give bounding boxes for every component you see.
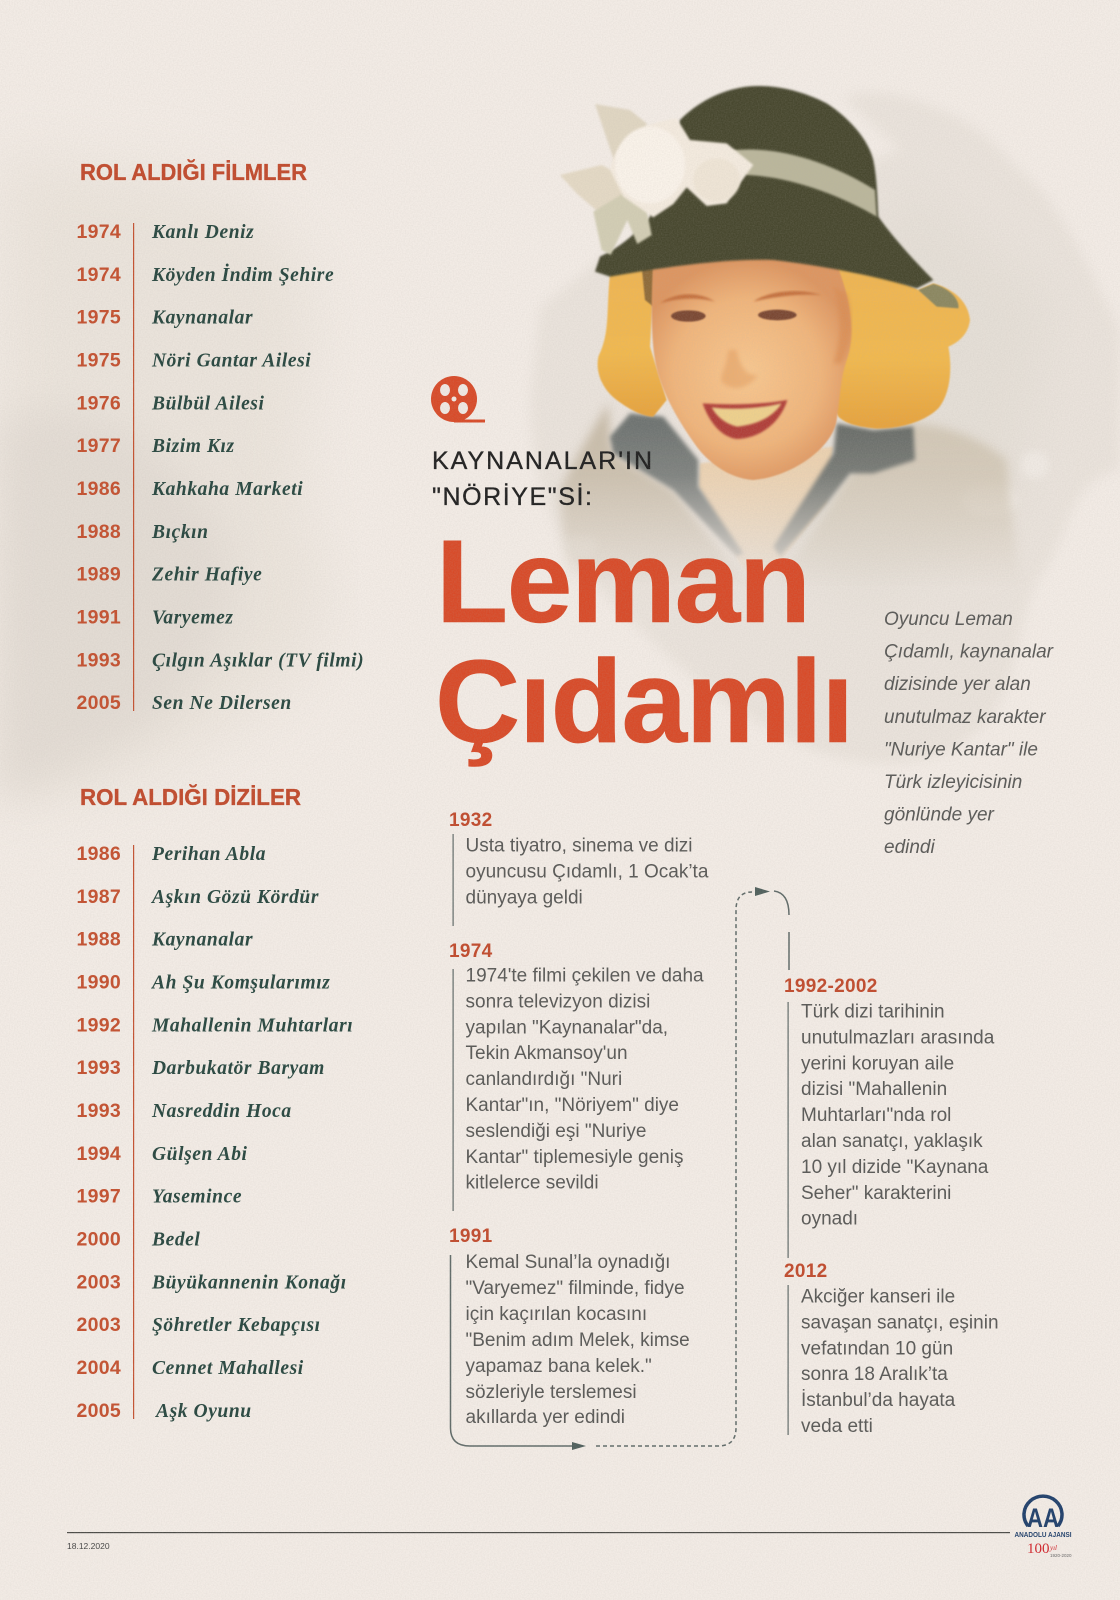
series rows: 1993: [76, 1057, 121, 1079]
timeline: 1974: sonra televizyon dizisi: [466, 991, 650, 1012]
timeline: 2012: İstanbul’da hayata: [801, 1390, 956, 1411]
timeline: 1991: akıllarda yer edindi: [466, 1407, 625, 1428]
series rows: Kaynanalar: [151, 930, 253, 951]
series rows: 1992: [76, 1014, 121, 1036]
divider line: series: [133, 845, 134, 1419]
timeline: 2012: veda etti: [801, 1416, 873, 1437]
timeline: 1974: 1974: [449, 941, 493, 962]
clothes fading into background: [556, 406, 1014, 570]
series rows: Şöhretler Kebapçısı: [152, 1315, 321, 1336]
panel: films list: [76, 158, 364, 714]
film rows: 1975: [76, 350, 121, 372]
title: name: Çıdamlı: [435, 636, 854, 768]
series rows: 1987: [76, 886, 121, 908]
series rows: [76, 843, 353, 1422]
series rows: Cennet Mahallesi: [152, 1358, 304, 1379]
timeline: 1932: dünyaya geldi: [466, 887, 583, 908]
timeline: 2012: savaşan sanatçı, eşinin: [801, 1312, 999, 1333]
film rows: 2005: [76, 692, 121, 714]
timeline: 1992-2002: [784, 976, 995, 1258]
series rows: 1986: [76, 843, 121, 865]
heading: series: ROL ALDIĞI DİZİLER: [80, 783, 301, 810]
series rows: 2005: [76, 1400, 121, 1422]
logo: Anadolu Ajansı: 100: [1027, 1541, 1050, 1557]
face: [652, 257, 851, 480]
series rows: Bedel: [151, 1230, 200, 1251]
series rows: 1997: [76, 1186, 121, 1208]
timeline: 1991: için kaçırılan kocasını: [466, 1304, 647, 1325]
timeline: 1992-2002: yerini koruyan aile: [801, 1053, 954, 1074]
timeline: 2012: 2012: [784, 1261, 827, 1282]
timeline: 1932: oyuncusu Çıdamlı, 1 Ocak’ta: [466, 861, 709, 882]
intro text: edindi: [884, 837, 935, 858]
title: name: [435, 516, 854, 768]
film rows: 1986: [76, 478, 121, 500]
film rows: 1993: [76, 649, 121, 671]
series rows: Aşk Oyunu: [154, 1401, 252, 1422]
logo: Anadolu Ajansı: ANADOLU AJANSI: [1014, 1530, 1072, 1539]
series rows: 1988: [76, 929, 121, 951]
film rows: Varyemez: [152, 608, 234, 629]
timeline: 1992-2002: Muhtarları"nda rol: [801, 1105, 951, 1126]
series rows: 2000: [76, 1229, 121, 1251]
timeline connector arrow: [450, 887, 789, 1450]
timeline: 1992-2002: 1992-2002: [784, 976, 878, 997]
timeline: 1992-2002: Türk dizi tarihinin: [801, 1002, 945, 1022]
film rows: Çılgın Aşıklar (TV filmi): [152, 650, 364, 671]
timeline: 1991: "Benim adım Melek, kimse: [466, 1330, 690, 1351]
timeline: 2012: sonra 18 Aralık’ta: [801, 1364, 948, 1385]
timeline: 1974: Kantar"ın, "Nöriyem" diye: [466, 1095, 679, 1116]
intro text: unutulmaz karakter: [884, 707, 1046, 728]
timeline: 1932: [449, 810, 709, 926]
timeline: 1991: [449, 1226, 690, 1428]
film rows: Bülbül Ailesi: [151, 393, 264, 414]
film rows: 1977: [76, 435, 121, 457]
series rows: Darbukatör Baryam: [151, 1058, 325, 1079]
kicker heading: KAYNANALAR'IN: [432, 447, 652, 475]
series rows: Büyükannenin Konağı: [151, 1272, 347, 1293]
timeline: 1974: yapılan "Kaynanalar"da,: [466, 1017, 668, 1038]
portrait photo of Leman Çıdamlı: [560, 86, 1020, 593]
intro text: "Nuriye Kantar" ile: [884, 739, 1038, 760]
series rows: 2003: [76, 1314, 121, 1336]
date: 18.12.2020: [67, 1541, 110, 1551]
film rows: 1989: [76, 564, 121, 586]
hat: [595, 86, 933, 288]
logo: Anadolu Ajansı: [1014, 1496, 1072, 1558]
film rows: 1975: [76, 307, 121, 329]
logo: Anadolu Ajansı: AA: [1027, 1503, 1059, 1533]
timeline: 1992-2002: oynadı: [801, 1209, 858, 1230]
panel: series list: [76, 783, 353, 1422]
icon: film reel: [431, 376, 485, 422]
kicker heading: [432, 447, 652, 511]
intro text: [884, 609, 1054, 858]
timeline: 1974: canlandırdığı "Nuri: [466, 1069, 622, 1090]
timeline: 1992-2002: Seher" karakterini: [801, 1183, 951, 1204]
divider line: films: [133, 223, 134, 711]
film rows: Bıçkın: [151, 522, 209, 543]
series rows: 1990: [76, 972, 121, 994]
intro text: Oyuncu Leman: [884, 609, 1013, 630]
film rows: 1974: [76, 264, 121, 286]
heading: films: ROL ALDIĞI FİLMLER: [80, 158, 307, 185]
title: name: Leman: [436, 516, 811, 648]
timeline: 1974: Kantar" tiplemesiyle geniş: [466, 1147, 683, 1168]
series rows: 2003: [76, 1271, 121, 1293]
series rows: Mahallenin Muhtarları: [151, 1015, 353, 1036]
series rows: 1993: [76, 1100, 121, 1122]
film rows: Zehir Hafiye: [151, 565, 262, 586]
series rows: Aşkın Gözü Kördür: [150, 887, 319, 908]
timeline: 1974: [449, 941, 704, 1211]
timeline: 1991: 1991: [449, 1226, 493, 1247]
intro text: gönlünde yer: [884, 805, 995, 826]
film rows: 1988: [76, 521, 121, 543]
hat flower: [560, 104, 753, 255]
hat band: [730, 149, 877, 217]
timeline: 1932: 1932: [449, 810, 492, 831]
film rows: [76, 221, 364, 714]
eyes and brows: [660, 294, 715, 303]
film rows: Kanlı Deniz: [151, 222, 254, 243]
timeline: 1992-2002: unutulmazları arasında: [801, 1027, 995, 1048]
timeline: 1991: yapamaz bana kelek.": [466, 1356, 652, 1377]
intro text: Türk izleyicisinin: [884, 772, 1022, 793]
film rows: Köyden İndim Şehire: [151, 264, 334, 286]
series rows: Perihan Abla: [151, 844, 266, 865]
film rows: Nöri Gantar Ailesi: [151, 350, 311, 372]
timeline: 1992-2002: alan sanatçı, yaklaşık: [801, 1131, 983, 1152]
timeline: 1974: kitlelerce sevildi: [466, 1173, 599, 1194]
logo: Anadolu Ajansı: 1920-2020: [1050, 1553, 1072, 1558]
series rows: 1994: [76, 1143, 121, 1165]
series rows: Nasreddin Hoca: [151, 1101, 292, 1122]
timeline: 1932: Usta tiyatro, sinema ve dizi: [466, 836, 693, 856]
film rows: Kahkaha Marketi: [151, 479, 303, 500]
timeline: 1991: Kemal Sunal’la oynadığı: [466, 1252, 670, 1273]
kicker heading: "NÖRİYE"Sİ:: [432, 482, 592, 511]
timeline: 1974: seslendiği eşi "Nuriye: [466, 1121, 646, 1142]
timeline: 1991: "Varyemez" filminde, fidye: [466, 1278, 685, 1299]
timeline: 2012: Akciğer kanseri ile: [801, 1286, 955, 1308]
film rows: 1974: [76, 221, 121, 243]
intro text: Çıdamlı, kaynanalar: [884, 642, 1054, 663]
timeline: 1992-2002: 10 yıl dizide "Kaynana: [801, 1157, 989, 1178]
film rows: Bizim Kız: [151, 436, 235, 457]
timeline: 2012: vefatından 10 gün: [801, 1338, 953, 1359]
smile: [703, 400, 787, 439]
film rows: 1976: [76, 392, 121, 414]
logo: Anadolu Ajansı: yıl: [1049, 1544, 1057, 1552]
timeline: 1974: Tekin Akmansoy'un: [466, 1043, 628, 1064]
film rows: Sen Ne Dilersen: [152, 693, 292, 714]
film rows: Kaynanalar: [151, 308, 253, 329]
timeline: 1992-2002: dizisi "Mahallenin: [801, 1079, 947, 1100]
series rows: Ah Şu Komşularımız: [150, 972, 330, 994]
series rows: Yasemince: [152, 1187, 242, 1208]
film rows: 1991: [76, 607, 121, 629]
ink stain behind portrait: [530, 93, 1120, 764]
hair: [598, 260, 667, 417]
footer rule: [67, 1532, 1010, 1533]
intro text: dizisinde yer alan: [884, 674, 1031, 695]
series rows: Gülşen Abi: [152, 1144, 248, 1165]
series rows: 2004: [76, 1357, 121, 1379]
timeline: 2012: [784, 1261, 999, 1437]
timeline: 1974: 1974'te filmi çekilen ve daha: [466, 966, 704, 986]
timeline: 1991: sözleriyle terslemesi: [466, 1382, 637, 1403]
